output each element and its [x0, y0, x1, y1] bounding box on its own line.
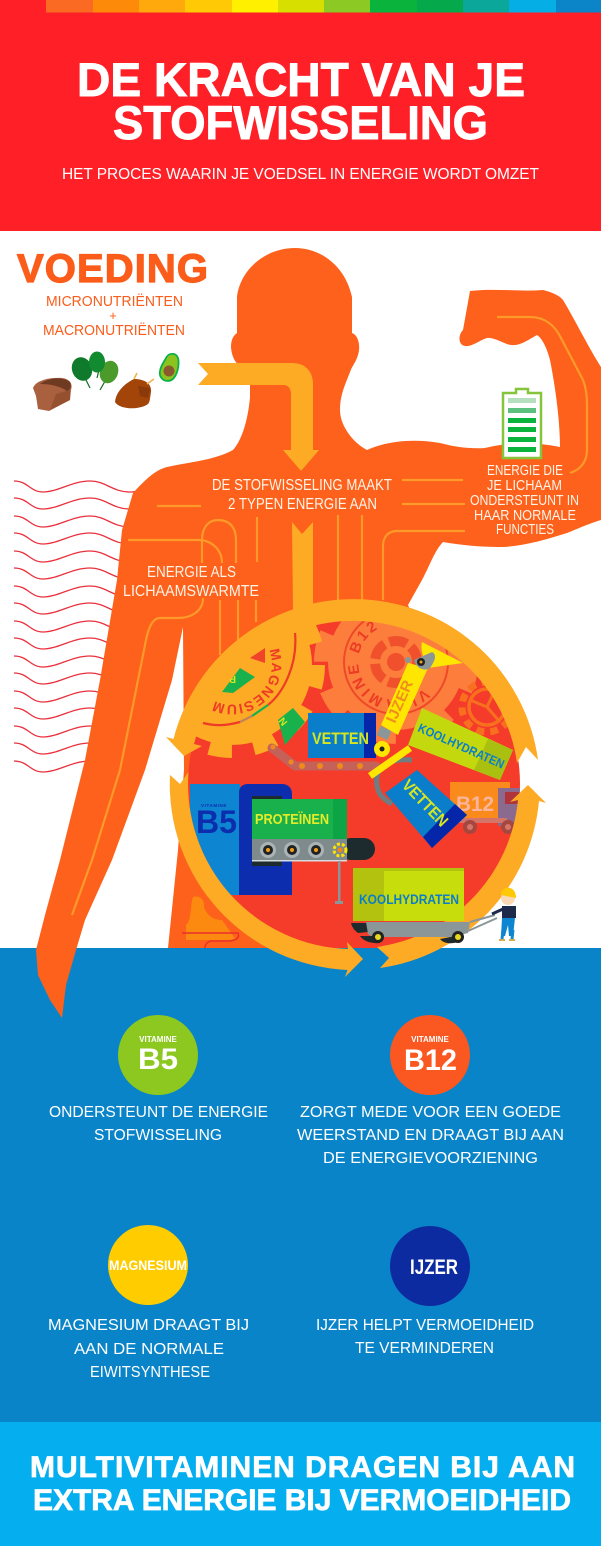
- text: energie als lichaamswarmte: ENERGIE ALS: [147, 564, 236, 581]
- cart: koolhydraten: [351, 868, 497, 943]
- footer banner: MULTIVITAMINEN DRAGEN BIJ AAN: [30, 1451, 575, 1484]
- title: [77, 53, 525, 149]
- benefit: magnesium: AAN DE NORMALE: [74, 1341, 224, 1358]
- conveyor: proteinen: [252, 799, 375, 904]
- gear: magnesium: MAGNESIUM: [212, 648, 282, 714]
- icon: bread: [33, 378, 72, 411]
- heading: voeding: [17, 247, 208, 339]
- benefit: vitamine b12: WEERSTAND EN DRAAGT BIJ AAN: [297, 1127, 564, 1144]
- subtitle: HET PROCES WAARIN JE VOEDSEL IN ENERGIE WORDT OMZET: [62, 166, 540, 183]
- heading: voeding: MACRONUTRIËNTEN: [43, 322, 185, 339]
- bottom body decoration: [182, 897, 239, 948]
- arrow: left arc: [170, 772, 363, 977]
- arrow: food into body: [198, 363, 319, 471]
- benefit: magnesium: MAGNESIUM DRAAGT BIJ: [48, 1317, 249, 1334]
- footer banner: [0, 1422, 601, 1546]
- text: energie die je lichaam ondersteunt: ONDERSTEUNT IN: [470, 492, 579, 509]
- text: stofwisseling: 2 TYPEN ENERGIE AAN: [228, 496, 377, 513]
- benefit: ijzer: IJZER HELPT VERMOEIDHEID: [316, 1317, 534, 1334]
- text: energie die je lichaam ondersteunt: FUNCTIES: [496, 521, 554, 538]
- benefit: ijzer: IJZER: [410, 1256, 458, 1279]
- benefit: vitamine b12: VITAMINE: [411, 1035, 449, 1044]
- benefit: vitamine b12: DE ENERGIEVOORZIENING: [323, 1150, 538, 1167]
- benefit: vitamine b12: [297, 1015, 564, 1167]
- machine: b5: [190, 784, 292, 895]
- benefit: magnesium: [48, 1225, 249, 1381]
- box: vetten tilted: VETTEN: [398, 776, 451, 831]
- icon: avocado: [160, 354, 179, 381]
- box: vetten tilted: [385, 770, 467, 848]
- title: DE KRACHT VAN JE: [77, 53, 525, 106]
- text: stofwisseling: [212, 477, 392, 513]
- body silhouette: [36, 248, 601, 1018]
- benefit: magnesium: MAGNESIUM: [109, 1258, 187, 1273]
- rainbow colour strip: [46, 0, 601, 12]
- text: energie als lichaamswarmte: LICHAAMSWARMTE: [123, 583, 259, 600]
- benefit: vitamine b5: STOFWISSELING: [94, 1127, 222, 1144]
- box: vetten: VETTEN: [312, 730, 369, 748]
- machine: b5: B5: [196, 804, 237, 840]
- body circuit lines: [72, 317, 587, 915]
- text: energie die je lichaam ondersteunt: [470, 462, 579, 538]
- heat waves: [14, 481, 170, 772]
- benefit: vitamine b12: ZORGT MEDE VOOR EEN GOEDE: [300, 1104, 561, 1121]
- heading: voeding: VOEDING: [17, 247, 208, 291]
- gear: small orange: [462, 682, 512, 732]
- panel: blue benefits background: [0, 948, 601, 1422]
- text: energie die je lichaam ondersteunt: HAAR NORMALE: [474, 507, 576, 524]
- arrow: top arc: [166, 599, 538, 763]
- heading: voeding: MICRONUTRIËNTEN: [46, 293, 183, 310]
- footer banner: EXTRA ENERGIE BIJ VERMOEIDHEID: [33, 1484, 571, 1517]
- heading: voeding: +: [109, 308, 117, 323]
- panel: red header: [0, 0, 601, 231]
- benefit: ijzer: TE VERMINDEREN: [355, 1340, 494, 1357]
- gear: magnesium: N: [277, 715, 290, 727]
- text: energie die je lichaam ondersteunt: JE LICHAAM: [487, 477, 562, 494]
- arrow: down to metabolism: [292, 522, 313, 612]
- gear: vitamine b12: VITAMINE B12: [348, 622, 430, 708]
- text: stofwisseling: DE STOFWISSELING MAAKT: [212, 477, 392, 494]
- truck: b12: [450, 782, 522, 834]
- box: koolhydraten tilted: [408, 708, 513, 780]
- metabolism disc: [188, 620, 520, 948]
- benefit: ijzer: [316, 1226, 534, 1357]
- robot arm: grey handle: [377, 760, 412, 804]
- benefit: magnesium: EIWITSYNTHESE: [90, 1364, 210, 1381]
- benefit: vitamine b5: [49, 1015, 268, 1144]
- benefit: vitamine b5: B5: [138, 1043, 178, 1076]
- icon: worker: [492, 888, 516, 941]
- box: vetten: [308, 713, 376, 758]
- box: koolhydraten tilted: KOOLHYDRATEN: [416, 721, 506, 772]
- benefit: vitamine b5: VITAMINE: [139, 1035, 177, 1044]
- icon: battery: [503, 389, 541, 458]
- text: energie als lichaamswarmte: [123, 564, 259, 600]
- gear: magnesium: [196, 625, 325, 758]
- title: STOFWISSELING: [113, 96, 488, 149]
- gear: magnesium: P: [229, 673, 236, 684]
- benefit: vitamine b5: ONDERSTEUNT DE ENERGIE: [49, 1104, 268, 1121]
- conveyor: proteinen: PROTEÏNEN: [255, 811, 329, 828]
- truck: b12: B12: [456, 793, 494, 816]
- icon: spinach: [68, 352, 121, 390]
- machine: b5: VITAMINE: [201, 803, 227, 808]
- benefit: vitamine b12: B12: [404, 1044, 457, 1077]
- gear: vitamine b12: [314, 620, 477, 744]
- robot arm: ijzer: [370, 642, 463, 776]
- arrow: right arc: [377, 785, 546, 968]
- conveyor belt under vetten: [270, 744, 376, 769]
- robot arm: ijzer: IJZER: [383, 677, 417, 726]
- icon: roast chicken: [115, 373, 154, 408]
- cart: koolhydraten: KOOLHYDRATEN: [359, 892, 459, 907]
- text: energie die je lichaam ondersteunt: ENERGIE DIE: [487, 462, 563, 479]
